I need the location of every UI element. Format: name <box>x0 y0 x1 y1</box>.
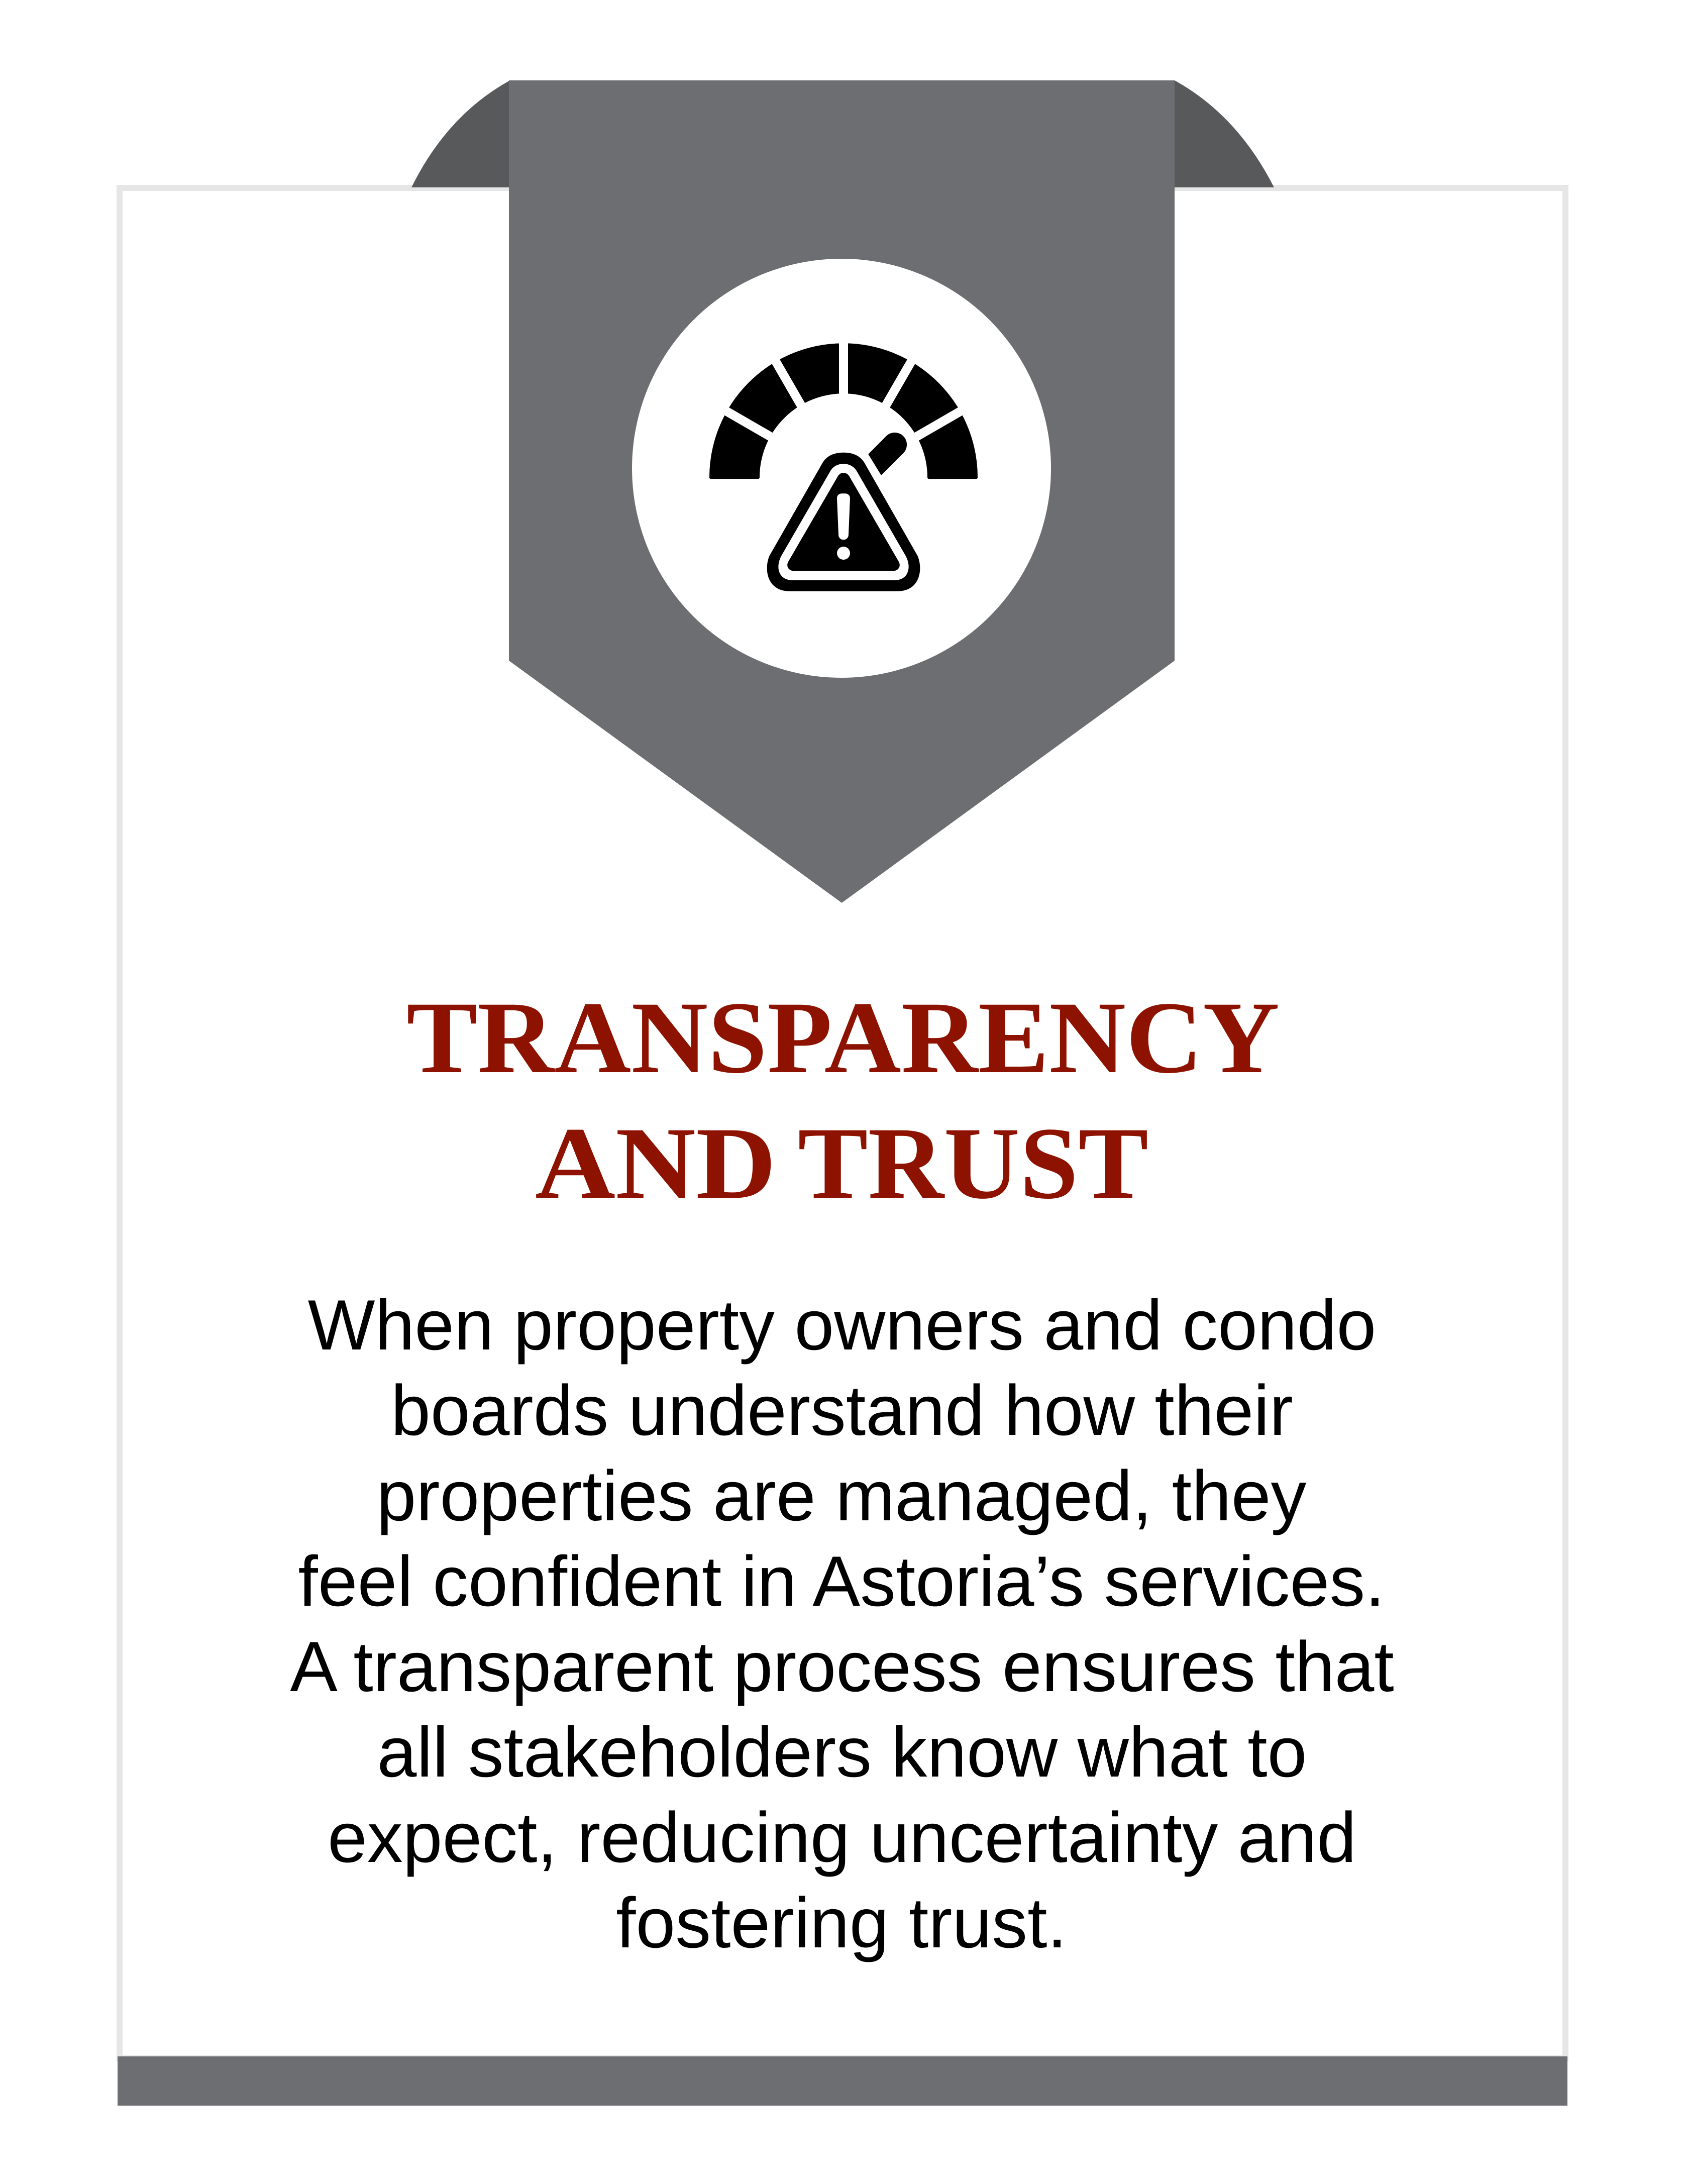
gauge arc segments <box>711 336 976 477</box>
heading: AND <box>535 1106 776 1220</box>
body text: expect, reducing uncertainty and <box>328 1798 1356 1878</box>
body text: A transparent process ensures that <box>290 1627 1394 1707</box>
panel: card frame <box>120 188 1565 2058</box>
body text: When property owners and condo <box>308 1286 1376 1365</box>
warning triangle <box>767 453 920 591</box>
ribbon fold: right <box>1175 80 1274 187</box>
bottom bar <box>118 2056 1567 2106</box>
body text: fostering trust. <box>616 1884 1067 1963</box>
body text: properties are managed, they <box>377 1457 1307 1536</box>
body text: boards understand how their <box>391 1371 1293 1450</box>
body text <box>290 1286 1394 1963</box>
heading: TRUST <box>798 1106 1148 1220</box>
icon circle <box>632 259 1051 678</box>
body text: all stakeholders know what to <box>377 1713 1307 1792</box>
icon: gauge with warning triangle <box>711 336 976 591</box>
heading <box>406 981 1280 1220</box>
ribbon fold: left <box>411 80 510 187</box>
heading: TRANSPARENCY <box>406 981 1280 1095</box>
gauge needle <box>868 433 907 475</box>
ribbon banner <box>509 80 1175 903</box>
body text: feel confident in Astoria’s services. <box>298 1542 1385 1621</box>
